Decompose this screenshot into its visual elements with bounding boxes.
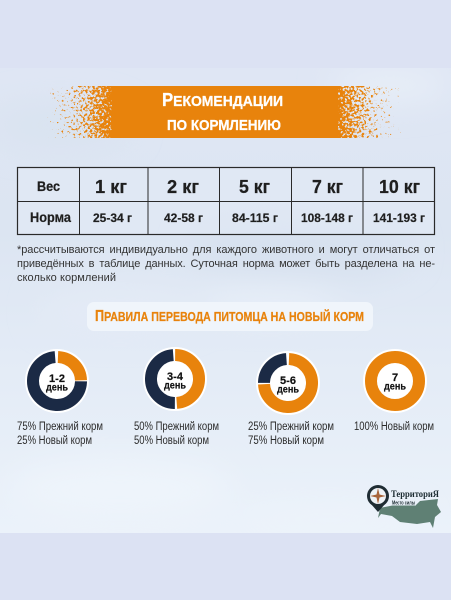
table header row: Вес	[37, 179, 60, 194]
footnote text: сколько кормлений	[17, 272, 116, 284]
caption: day 3-4	[134, 421, 219, 447]
donut: day 5-6: день	[277, 384, 299, 396]
title banner	[46, 86, 402, 138]
rules heading pill	[87, 302, 373, 331]
caption: day 5-6	[248, 421, 334, 447]
banner title line 1: РЕКОМЕНДАЦИИ	[162, 90, 283, 110]
caption: day 1-2: 75% Прежний корм	[17, 421, 103, 433]
footnote text: *рассчитываются индивидуально для каждого животного и могут отличаться от	[17, 244, 435, 256]
donut: day 5-6	[256, 351, 320, 415]
table header row	[37, 176, 420, 197]
logo tagline: Место силы	[392, 500, 415, 506]
donut: day 7: день	[384, 380, 406, 392]
donut: day 3-4: 3-4	[167, 371, 184, 383]
donut: day 3-4	[143, 347, 207, 411]
donut: day 1-2: 1-2	[49, 373, 65, 385]
caption: day 3-4: 50% Новый корм	[134, 435, 209, 447]
logo: Территория	[367, 485, 441, 528]
table header row: 5 кг	[239, 176, 270, 197]
logo compass pin	[367, 485, 389, 512]
donut: day 1-2	[25, 349, 89, 413]
table norm row: 25-34 г	[93, 211, 132, 225]
donut: day 1-2: день	[46, 382, 68, 394]
table header row: 10 кг	[379, 176, 420, 197]
donut: day 3-4: день	[164, 380, 186, 392]
banner title line 2: ПО КОРМЛЕНИЮ	[167, 117, 281, 134]
logo map of Russia	[378, 499, 441, 528]
table norm row: 42-58 г	[164, 211, 203, 225]
donut: day 5-6: 5-6	[280, 375, 296, 387]
banner solid band	[112, 86, 338, 138]
table header row: 1 кг	[95, 176, 127, 197]
caption: day 1-2: 25% Новый корм	[17, 435, 92, 447]
table header row: 7 кг	[312, 176, 343, 197]
caption: day 3-4: 50% Прежний корм	[134, 421, 219, 433]
caption: day 5-6: 75% Новый корм	[248, 435, 324, 447]
table norm row	[30, 210, 425, 225]
caption: day 7: 100% Новый корм	[354, 421, 434, 433]
banner grunge edges	[46, 86, 402, 138]
footnote text: приведённых в таблице данных. Суточная норма может быть разделена на не-	[17, 258, 435, 270]
caption: day 1-2	[17, 421, 103, 447]
table norm row: 84-115 г	[232, 211, 278, 225]
table norm row: Норма	[30, 210, 71, 225]
feeding table	[17, 167, 435, 235]
table header row: 2 кг	[167, 176, 199, 197]
footnote text	[17, 244, 435, 284]
logo wordmark: ТерриториЯ	[391, 490, 439, 500]
donut: day 7	[363, 349, 427, 413]
table norm row: 141-193 г	[373, 211, 425, 225]
donut: day 7: 7	[392, 372, 398, 384]
rules heading pill: ПРАВИЛА ПЕРЕВОДА ПИТОМЦА НА НОВЫЙ КОРМ	[95, 308, 364, 325]
table norm row: 108-148 г	[301, 211, 353, 225]
caption: day 5-6: 25% Прежний корм	[248, 421, 334, 433]
logo tagline plate	[391, 500, 416, 506]
